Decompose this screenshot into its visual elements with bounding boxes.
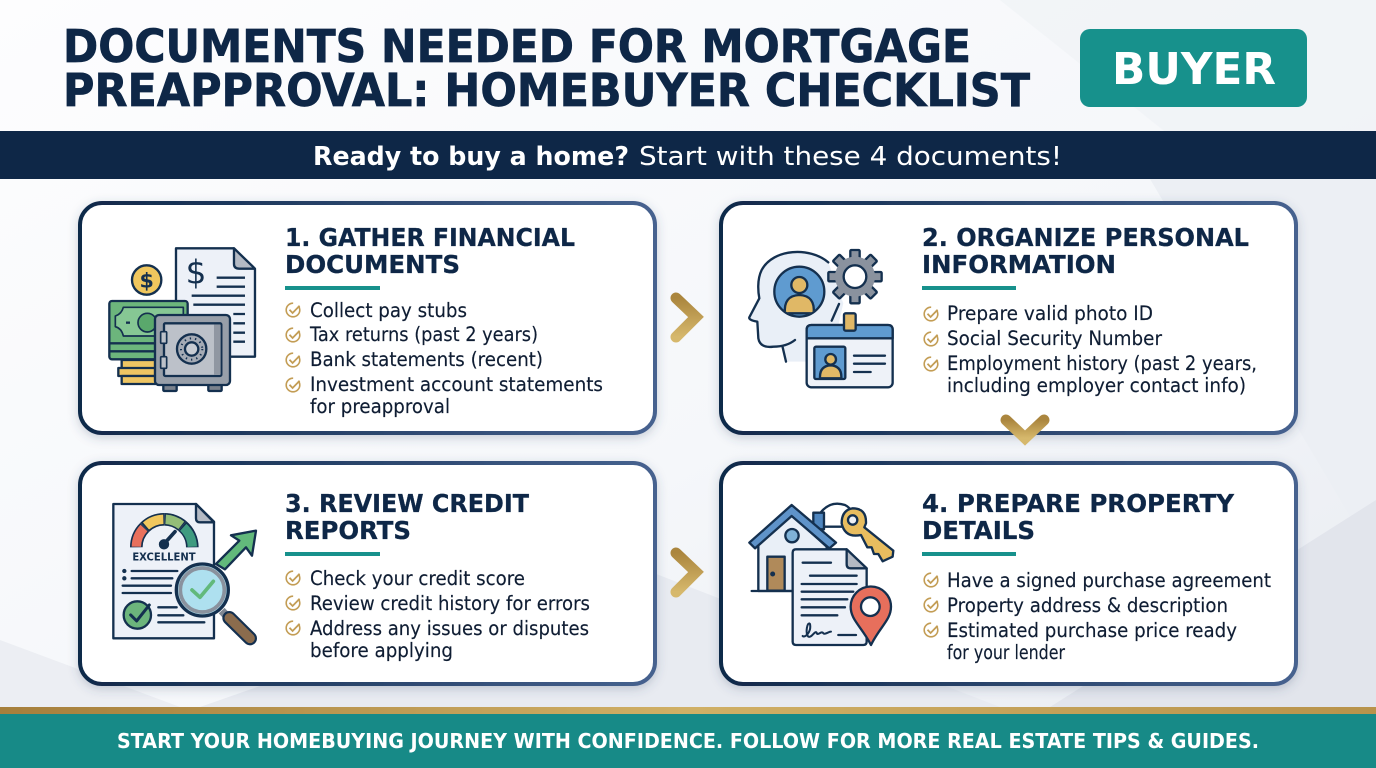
- icon: head, gear and ID card: [749, 250, 893, 387]
- heading underline: [285, 286, 380, 290]
- icon: money, safe and document: $: [186, 253, 206, 291]
- footer: [0, 707, 1376, 768]
- heading: 3. REVIEW CREDIT: [285, 489, 529, 518]
- checklist: for preapproval: [310, 395, 450, 418]
- icon: money, safe and document: [109, 248, 255, 391]
- heading: 1. GATHER FINANCIAL: [285, 223, 575, 252]
- icon: credit report with magnifier: EXCELLENT: [132, 552, 196, 564]
- checklist: Prepare valid photo ID: [947, 302, 1153, 325]
- icon: house, key, contract and map pin: [749, 504, 893, 645]
- checklist: [924, 569, 1271, 664]
- checklist: Estimated purchase price ready: [947, 619, 1237, 642]
- panel: prepare property details: [721, 463, 1296, 684]
- heading: 2. ORGANIZE PERSONAL: [922, 223, 1249, 252]
- heading: DOCUMENTS: [285, 250, 460, 279]
- arrow: step 1 to step 2: [676, 298, 696, 337]
- title: DOCUMENTS NEEDED FOR MORTGAGE: [63, 20, 971, 73]
- title: [63, 20, 1030, 117]
- heading: [285, 223, 575, 279]
- checklist: Have a signed purchase agreement: [947, 569, 1271, 592]
- heading: [922, 223, 1249, 279]
- checklist: Property address & description: [947, 594, 1228, 617]
- heading: [922, 489, 1235, 545]
- checklist: Check your credit score: [310, 567, 525, 590]
- checklist: [924, 302, 1257, 397]
- title: PREAPPROVAL: HOMEBUYER CHECKLIST: [63, 64, 1030, 117]
- heading: [285, 489, 529, 545]
- checklist: [286, 567, 590, 662]
- heading: DETAILS: [922, 516, 1035, 545]
- heading: REPORTS: [285, 516, 411, 545]
- icon: credit report with magnifier: [113, 504, 256, 638]
- heading underline: [922, 552, 1016, 556]
- checklist: Collect pay stubs: [310, 299, 467, 322]
- heading: 4. PREPARE PROPERTY: [922, 489, 1235, 518]
- banner: Start with these 4 documents!: [639, 142, 1062, 172]
- badge: buyer: [1080, 29, 1307, 107]
- arrow: step 3 to step 4: [676, 553, 696, 592]
- checklist: including employer contact info): [947, 374, 1246, 397]
- checklist: Social Security Number: [947, 327, 1163, 350]
- footer: START YOUR HOMEBUYING JOURNEY WITH CONFIDENCE. FOLLOW FOR MORE REAL ESTATE TIPS & GUIDES.: [117, 729, 1259, 753]
- checklist: Address any issues or disputes: [310, 617, 589, 640]
- checklist: Bank statements (recent): [310, 348, 543, 371]
- icon: money, safe and document: $: [139, 268, 154, 292]
- panel: organize personal information: [721, 203, 1296, 433]
- checklist: [286, 299, 603, 418]
- banner: Ready to buy a home?: [313, 142, 629, 172]
- checklist: Investment account statements: [310, 373, 603, 396]
- banner: [0, 131, 1376, 179]
- heading underline: [285, 552, 380, 556]
- checklist: Tax returns (past 2 years): [309, 323, 538, 346]
- checklist: for your lender: [947, 641, 1066, 664]
- heading: INFORMATION: [922, 250, 1116, 279]
- checklist: before applying: [310, 639, 453, 662]
- heading underline: [922, 286, 1016, 290]
- arrow: step 2 to step 4: [1006, 420, 1044, 438]
- checklist: Employment history (past 2 years,: [947, 352, 1257, 375]
- checklist: Review credit history for errors: [310, 592, 590, 615]
- badge: buyer: BUYER: [1112, 44, 1276, 95]
- panel: review credit reports: [80, 463, 655, 684]
- panel: gather financial documents: [80, 203, 655, 433]
